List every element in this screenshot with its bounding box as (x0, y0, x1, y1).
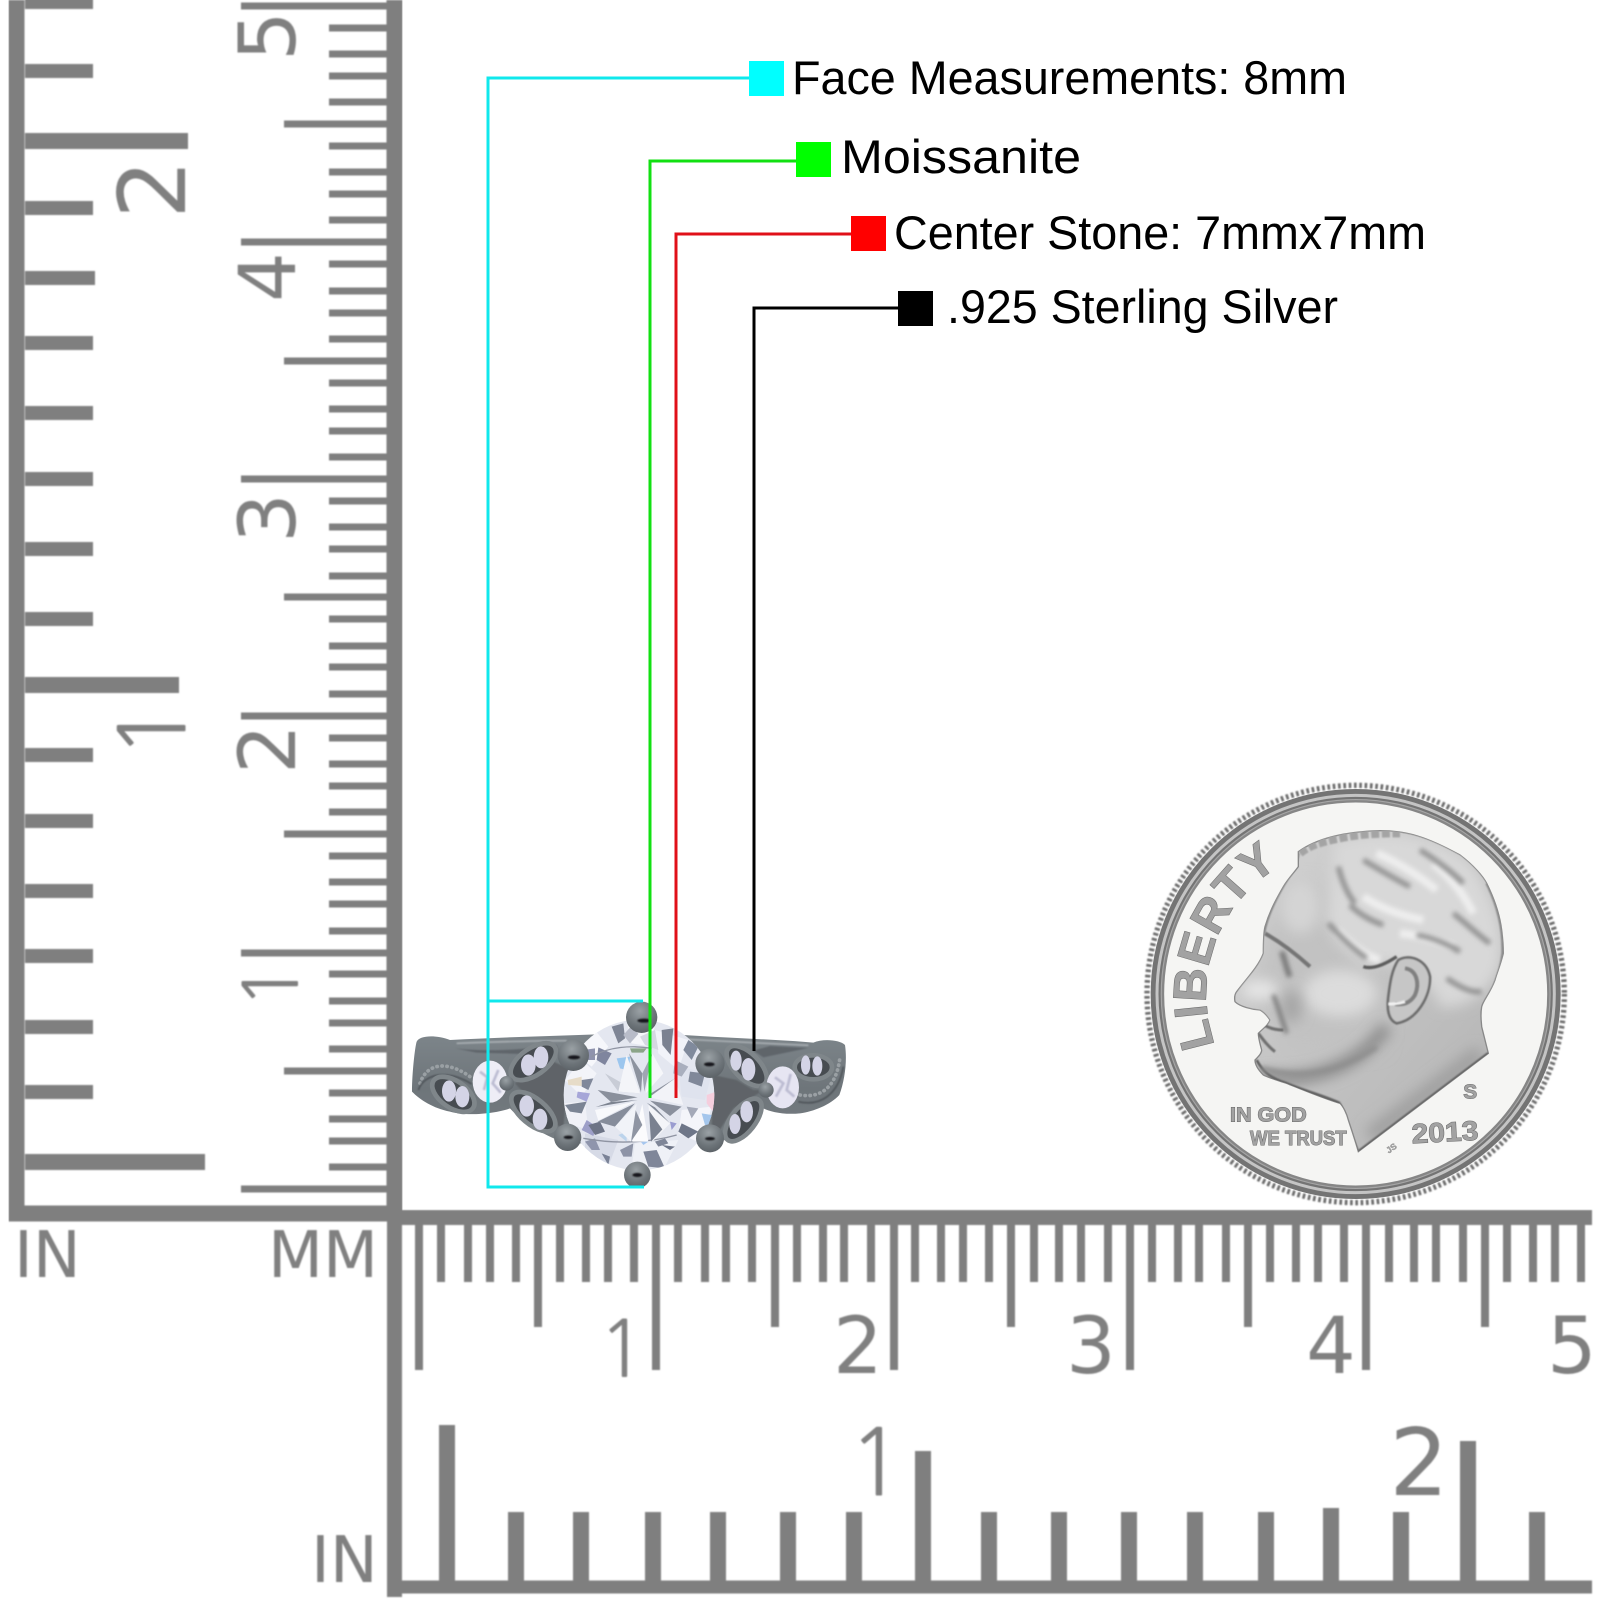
coin inscription: IN GOD WE TRUST: IN GOD (1230, 1104, 1307, 1127)
unit label: bottom inch: IN (311, 1524, 378, 1598)
ruler numbers: 2 (99, 159, 207, 219)
millimetre scale numbers: 4 (1306, 1302, 1356, 1392)
ruler numbers: 5 (224, 11, 314, 61)
coin date and mint mark (1384, 1080, 1479, 1155)
ruler numbers: 4 (224, 252, 314, 302)
legend: sterling silver: .925 Sterling Silver (947, 280, 1338, 333)
millimetre scale numbers: 2 (833, 1302, 883, 1392)
ruler numbers: 1 (233, 963, 309, 1009)
coin date and mint mark: S (1463, 1080, 1477, 1103)
hair (1327, 835, 1502, 1007)
ruler numbers: 1 (107, 703, 199, 759)
marquise settings with accent stones (426, 1036, 832, 1147)
coin inscription: IN GOD WE TRUST (1230, 1104, 1347, 1150)
legend: face measurements: Face Measurements: 8mm (792, 51, 1347, 104)
icon: dime coin: LIBERTY (1173, 840, 1270, 1051)
portrait (1235, 831, 1503, 1152)
inch scale numbers: 1 (848, 1417, 904, 1509)
millimetre scale numbers: 3 (1066, 1302, 1116, 1392)
star facets (595, 1053, 683, 1142)
coin inscription: IN GOD WE TRUST: WE TRUST (1250, 1127, 1347, 1150)
ear (1388, 957, 1430, 1023)
ruler frame (394, 1218, 1592, 1597)
inch scale numbers (848, 1409, 1449, 1517)
coin body and reeded rim (1147, 785, 1564, 1203)
ruler frame (16, 0, 394, 1214)
coin date and mint mark: 2013 (1411, 1115, 1479, 1149)
legend: center stone: Center Stone: 7mmx7mm (894, 206, 1426, 259)
side stones (473, 1061, 799, 1108)
crown facets (562, 1020, 716, 1168)
coin inscription: LIBERTY (1206, 866, 1280, 1045)
millimetre scale numbers: 1 (598, 1311, 646, 1389)
icon: ring (412, 1002, 846, 1188)
millimetre scale numbers (598, 1302, 1597, 1392)
legend: moissanite: Moissanite (841, 130, 1081, 183)
facial lines (1265, 933, 1310, 967)
ruler numbers: 3 (224, 493, 314, 543)
inch scale numbers: 2 (1389, 1409, 1449, 1517)
millimetre scale numbers: 5 (1547, 1302, 1597, 1392)
bottom horizontal ruler (394, 1218, 1597, 1597)
measurement leader: sterling silver (754, 308, 898, 1051)
measurement leader: moissanite (650, 161, 796, 1098)
millimetre scale ticks (241, 6, 387, 1189)
unit label: left inch: IN (14, 1219, 81, 1293)
millimetre scale ticks (419, 1225, 1581, 1370)
icon: dime coin (1143, 782, 1568, 1206)
coin date and mint mark: JS (1384, 1141, 1399, 1155)
ring band (412, 1034, 846, 1143)
inch scale ticks (25, 2, 205, 1162)
center stone (562, 1020, 716, 1170)
ruler numbers: 2 (224, 724, 314, 774)
face shading (1250, 932, 1298, 1030)
measurement leader: center stone (676, 234, 851, 1098)
ruler numbers (99, 11, 314, 1009)
inch scale ticks (447, 1425, 1537, 1581)
unit label: left millimetre: MM (268, 1219, 378, 1293)
measurement leader: face measurements (488, 78, 749, 1187)
prongs (499, 1002, 774, 1188)
left vertical ruler (16, 0, 394, 1214)
